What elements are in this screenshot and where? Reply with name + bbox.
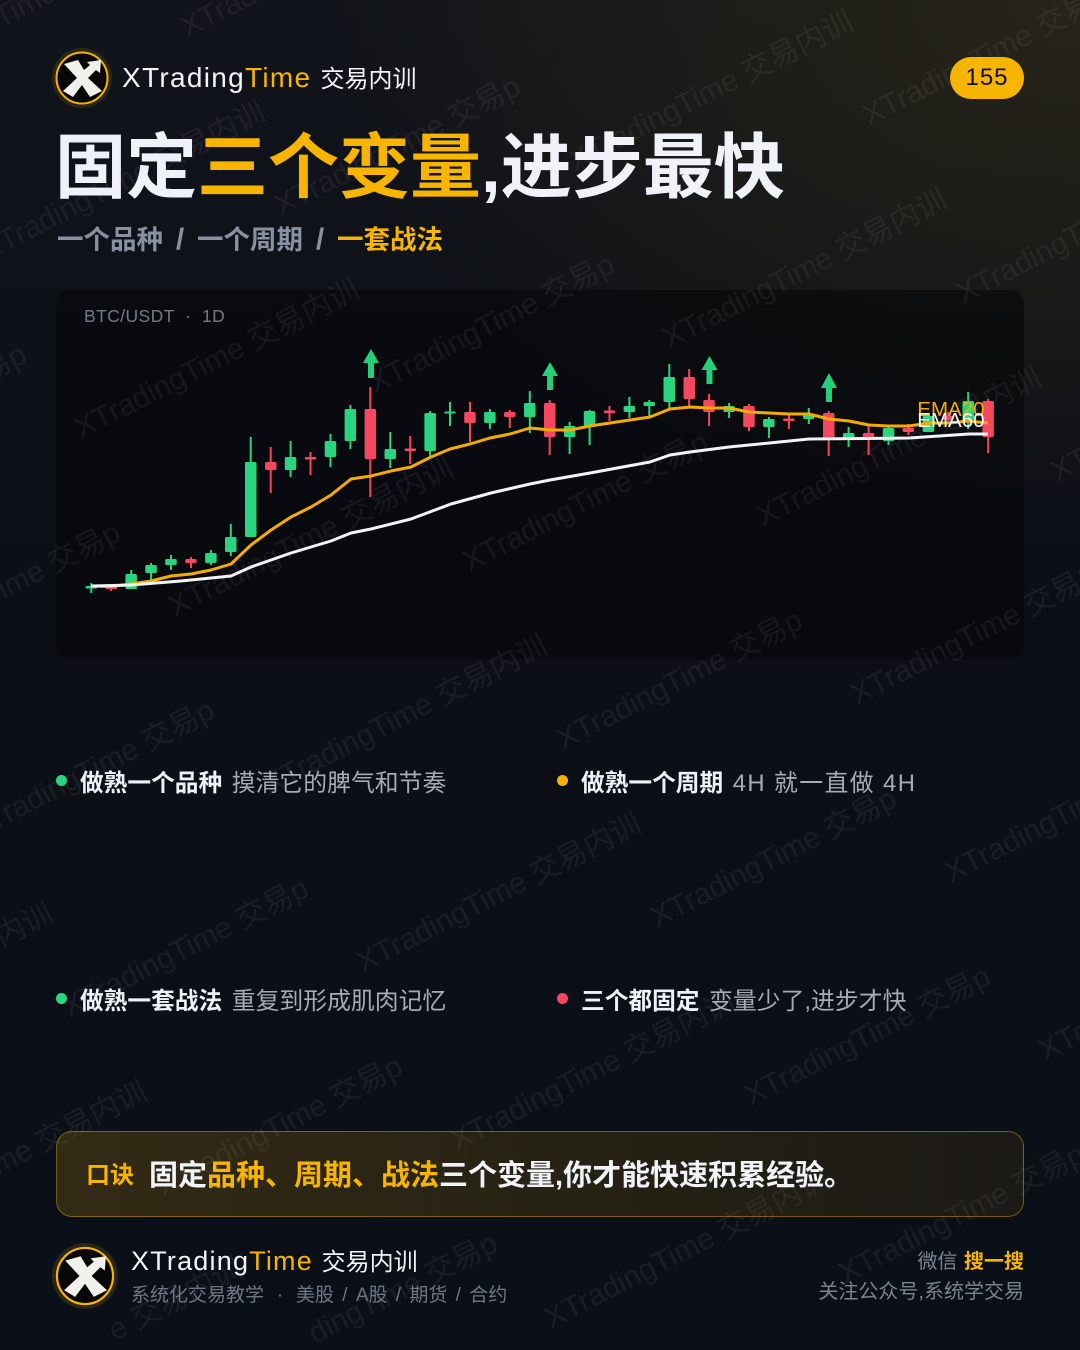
callout text: 固定品种、周期、战法三个变量,你才能快速积累经验。 xyxy=(149,1160,853,1192)
EMA20 line xyxy=(91,407,988,586)
EMA20 label: EMA20 xyxy=(917,398,984,421)
watermark layer: XTradingTime 交易p xyxy=(551,604,808,756)
arrow markers xyxy=(363,349,837,402)
watermark layer: XTradingTime 交易内训 xyxy=(445,985,740,1157)
footer wechat prompt: 微信 搜一搜 xyxy=(917,1251,1024,1273)
bullet: one instrument: 做熟一个品种 摸清它的脾气和节奏 xyxy=(80,770,446,797)
header brand name: XTradingTime 交易内训 xyxy=(122,62,416,93)
subtitle: 一个品种 一个周期 一套战法 xyxy=(57,225,443,255)
watermark layer: XTradingTime 交易内训 xyxy=(69,273,364,445)
panel: candlestick chart xyxy=(56,290,1024,659)
callout: mantra xyxy=(56,1131,1024,1217)
footer logo xyxy=(52,1243,118,1309)
red candles xyxy=(106,369,994,591)
watermark layer: XTradingTime 交易p xyxy=(457,426,714,578)
watermark layer: XTradingTime 交易内训 xyxy=(257,629,552,801)
footer follow note: 关注公众号,系统学交易 xyxy=(818,1281,1024,1303)
watermark layer: XTradingTime 交易p xyxy=(57,872,314,1024)
watermark layer: XTradingTime 交易内训 xyxy=(539,1163,834,1335)
footer tagline: 系统化交易教学 美股 / A股 / 期货 / 合约 xyxy=(131,1285,507,1306)
chart label: BTC/USDT · 1D xyxy=(84,306,225,326)
callout label: 口诀 xyxy=(86,1162,134,1189)
watermark layer: XTradingTime 交易内训 xyxy=(563,5,858,177)
watermark layer: XTradingTime 交易p xyxy=(363,248,620,400)
header logo xyxy=(52,48,112,108)
chart: candlesticks, EMA lines and arrows xyxy=(86,349,994,593)
footer tagline: · xyxy=(277,1285,283,1306)
issue number pill: 155 xyxy=(965,64,1009,91)
green candles xyxy=(86,364,974,593)
watermark layer: XTradingTime 交易p xyxy=(151,1050,408,1202)
issue number pill xyxy=(950,57,1024,99)
EMA60 label: EMA60 xyxy=(917,409,984,432)
watermark layer: XTradingTime 交易p xyxy=(739,960,996,1112)
bullet: one timeframe: 做熟一个周期 4H 就一直做 4H xyxy=(581,770,916,797)
bullet: all three fixed: 三个都固定 变量少了,进步才快 xyxy=(581,988,906,1015)
watermark layer: XTradingTime 交易内训 xyxy=(163,451,458,623)
subtitle: / xyxy=(316,223,324,256)
watermark layer: XTradingTime 交易内训 xyxy=(751,361,1046,533)
watermark layer: e 交易内训 xyxy=(103,1252,247,1347)
bullet: one strategy: 做熟一套战法 重复到形成肌肉记忆 xyxy=(80,988,446,1015)
watermark layer: XTradingTime 交易内训 xyxy=(351,807,646,979)
watermark layer: XTradingTime 交易p xyxy=(645,782,902,934)
watermark layer: dingTime 交易p xyxy=(303,1227,503,1350)
main title: 固定三个变量,进步最快 xyxy=(55,129,785,208)
EMA60 line xyxy=(91,434,988,586)
subtitle: / xyxy=(176,223,184,256)
watermark layer: XTradingTime 交易内训 xyxy=(657,183,952,355)
footer brand name: XTradingTime 交易内训 xyxy=(131,1246,418,1276)
watermark layer: XTradingTime 交易p xyxy=(269,70,526,222)
